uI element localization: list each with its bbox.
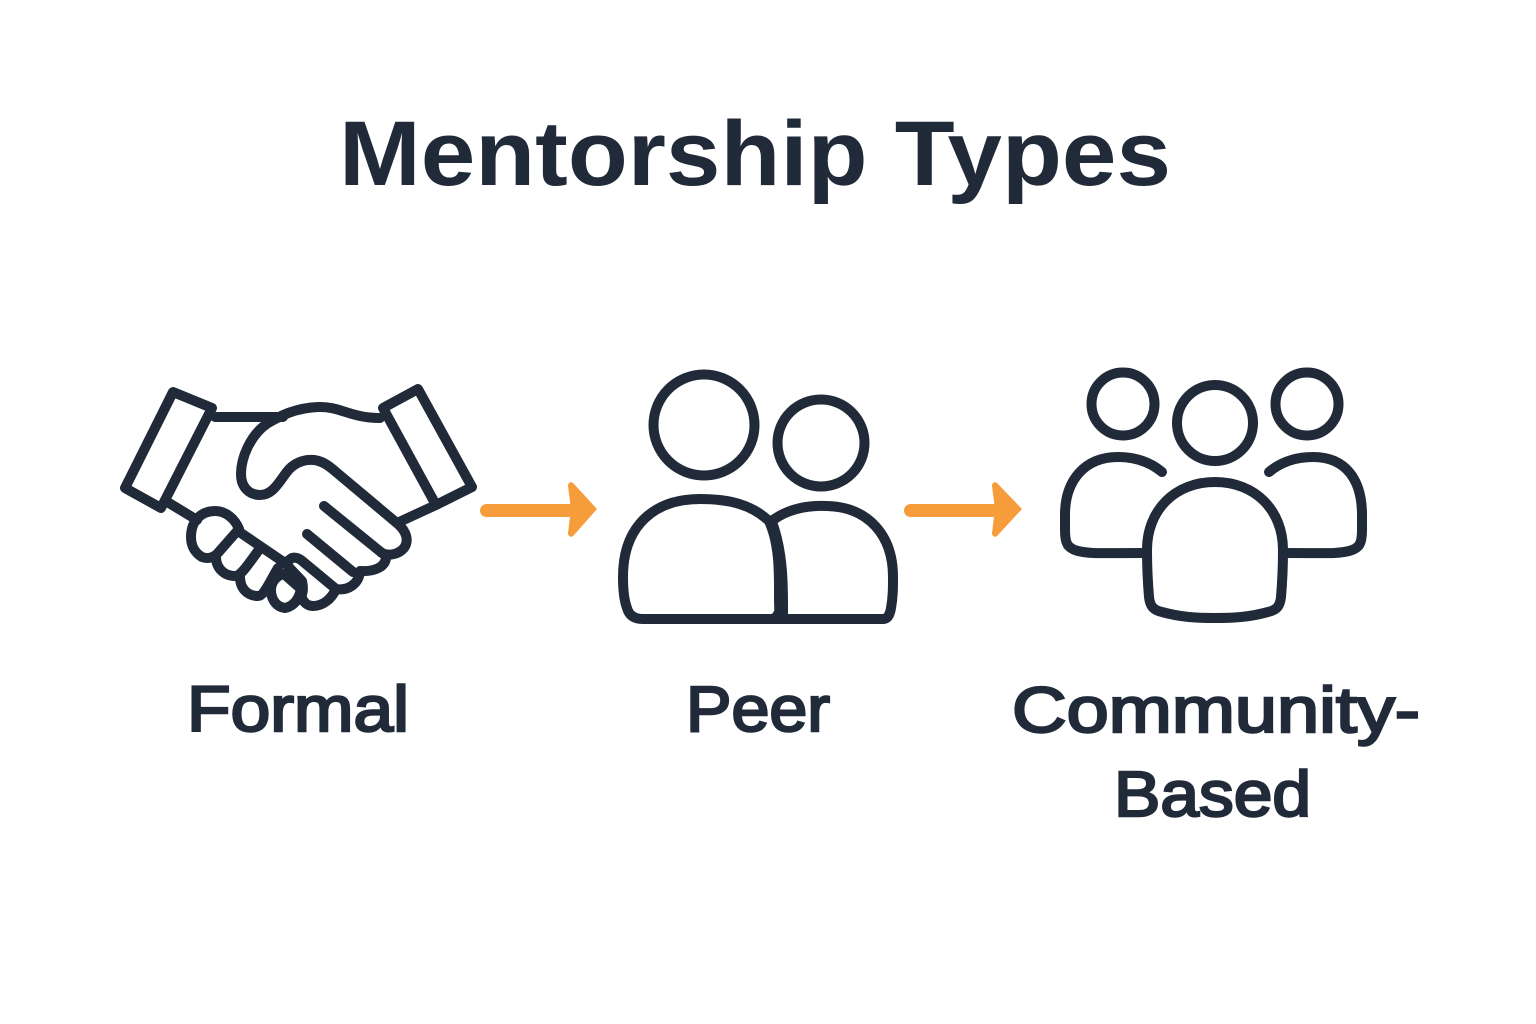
title: Mentorship Types (339, 103, 1171, 205)
icon: community group (1065, 372, 1362, 618)
label: Formal: Formal (187, 673, 409, 745)
label: Community-Based: Based (1114, 758, 1311, 830)
knuckles (191, 511, 239, 558)
label: Community-Based (1012, 674, 1420, 830)
label: Peer: Peer (686, 673, 830, 745)
arrow: formal to peer (480, 482, 597, 537)
icon: handshake (125, 389, 472, 608)
icon: two peers (623, 374, 893, 619)
label: Community-Based: Community- (1012, 674, 1420, 746)
arrow: peer to community (904, 482, 1022, 537)
